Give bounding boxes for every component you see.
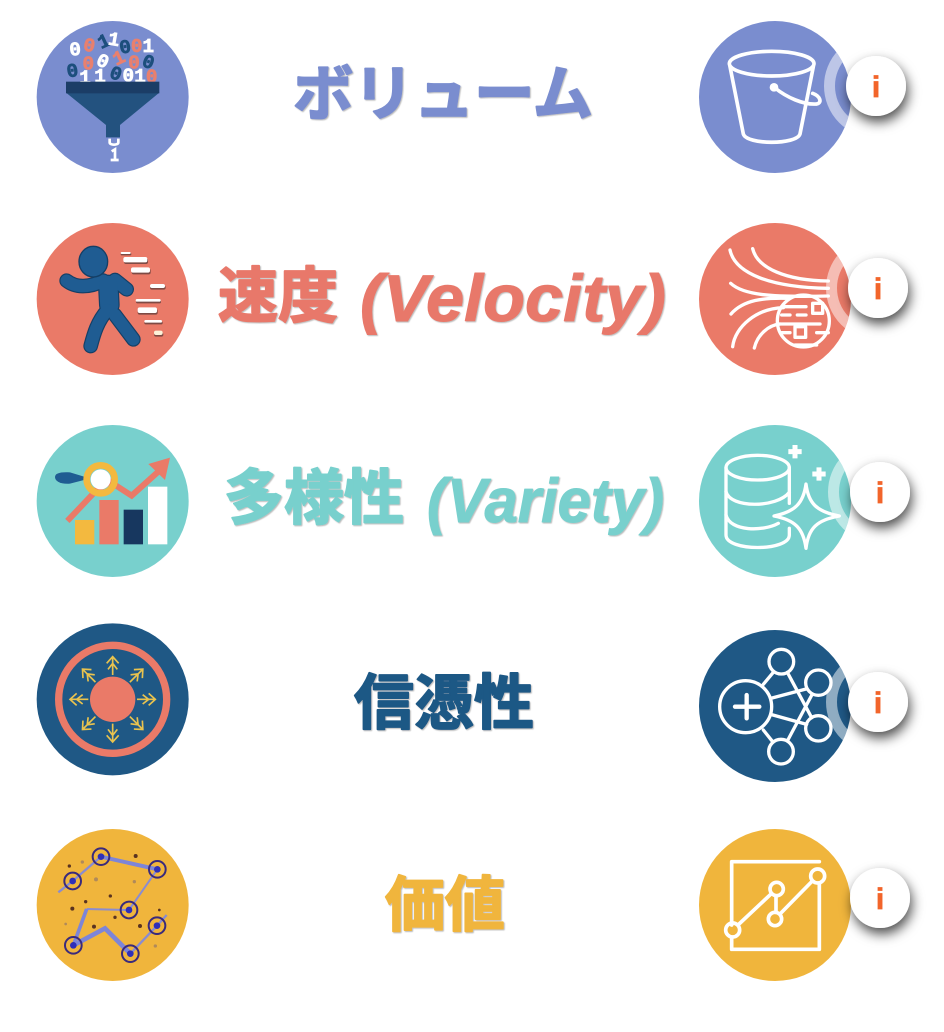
icon: running figure (37, 223, 189, 375)
icon: data funnel: 0 (92, 50, 112, 75)
icon: data funnel: 1 (106, 28, 121, 52)
icon: data funnel: 0 (118, 36, 133, 60)
icon: database with sparkle (699, 425, 851, 577)
heading: variety: 多様性 (224, 465, 404, 532)
icon: data funnel: 1 (94, 66, 106, 88)
heading: velocity (218, 261, 666, 335)
icon: data stream globe (699, 223, 851, 375)
heading: velocity: (Velocity) (360, 261, 666, 335)
icon: data funnel (37, 21, 189, 173)
icon: data funnel: 0 (65, 60, 80, 83)
info button: volume (824, 52, 917, 131)
icon: data funnel: 0 (68, 39, 82, 62)
icon: bucket (699, 21, 851, 173)
icon: line chart in frame (699, 829, 851, 981)
icon: data funnel: 0 (146, 67, 157, 89)
heading: variety (224, 465, 664, 536)
icon: data funnel: 0 (81, 34, 97, 58)
icon: data funnel: 1 (94, 30, 114, 55)
icon: data funnel: 1 (79, 67, 91, 89)
icon: data funnel: 0 (131, 36, 142, 58)
heading: value: 価値 (385, 872, 505, 939)
info button: veracity (826, 666, 919, 747)
icon: data funnel: 1 (109, 46, 129, 71)
row: velocity (37, 223, 924, 375)
info button: veracity: i (874, 687, 882, 720)
info button: variety: i (876, 477, 884, 510)
heading: volume: ボリューム (293, 61, 593, 128)
icon: radiating target (37, 623, 189, 775)
heading: velocity: 速度 (218, 263, 338, 330)
icon: data funnel: 0 (83, 54, 94, 76)
info button: velocity (826, 255, 919, 333)
row: veracity (37, 623, 924, 782)
info button: value: i (876, 883, 884, 916)
icon: data funnel: 0 (139, 51, 157, 75)
icon: constellation (37, 829, 189, 981)
icon: data funnel: 0 (128, 53, 140, 75)
icon: data funnel: 0 (123, 65, 134, 87)
icon: data funnel: 1 (134, 66, 146, 88)
icon: data funnel: 0 (106, 62, 125, 87)
info button: velocity: i (874, 273, 882, 306)
info button: variety (828, 459, 921, 537)
row: value (37, 829, 910, 981)
heading: variety: (Variety) (427, 467, 664, 536)
row: variety (37, 425, 926, 577)
info button: value (850, 868, 910, 928)
icon: data funnel: 1 (143, 36, 154, 58)
info button: volume: i (872, 71, 880, 104)
row: volume (37, 21, 922, 173)
icon: bar chart with magnifier (37, 425, 189, 577)
icon: neural network (699, 630, 851, 782)
heading: veracity: 信憑性 (354, 670, 534, 737)
